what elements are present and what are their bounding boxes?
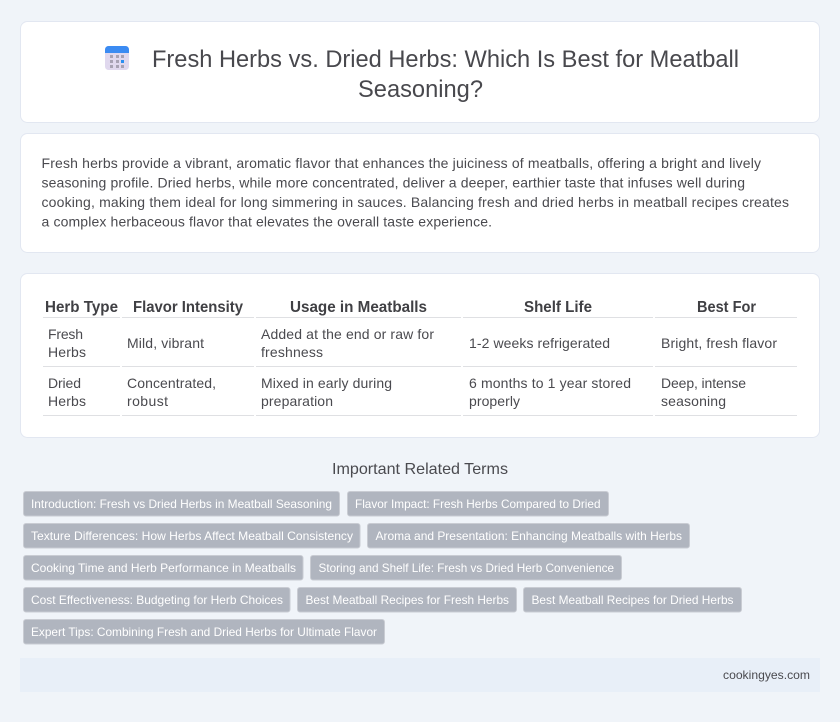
table row: dried herbs: properly (469, 393, 520, 409)
table row: fresh herbs: Mild, vibrant (127, 335, 204, 351)
table row: dried herbs: preparation (261, 393, 333, 409)
heading: related terms: Important Related Terms (332, 461, 508, 478)
related term chips (24, 492, 742, 644)
chip: cooking time (24, 556, 303, 580)
chip: texture: Texture Differences: How Herbs Affect Meatball Consistency (31, 529, 353, 543)
chip: aroma: Aroma and Presentation: Enhancing Meatballs with Herbs (376, 529, 682, 543)
table row: dried herbs: Herbs (48, 393, 86, 409)
chip: fresh recipes: Best Meatball Recipes for Fresh Herbs (306, 593, 509, 607)
table row: fresh herbs: Herbs (48, 344, 86, 360)
chip: dried recipes: Best Meatball Recipes for Dried Herbs (532, 593, 734, 607)
panel: introduction (20, 134, 820, 252)
table row: fresh herbs: freshness (261, 344, 323, 360)
panel: comparison table (20, 274, 820, 438)
table row: dried herbs: Concentrated, (127, 375, 216, 391)
table header: Flavor Intensity (133, 299, 243, 316)
text block: introduction: Fresh herbs provide a vibrant, aromatic flavor that enhances the juiciness of meatballs, offering a bright and lively (42, 155, 761, 171)
table row: fresh herbs: Fresh (48, 326, 83, 342)
chip: dried recipes (524, 588, 742, 612)
chip: storing (310, 556, 622, 580)
footer (20, 658, 820, 692)
table row: dried herbs: Deep, intense (661, 375, 746, 391)
chip: flavor impact: Flavor Impact: Fresh Herbs Compared to Dried (355, 497, 600, 511)
chip: storing: Storing and Shelf Life: Fresh vs Dried Herb Convenience (318, 561, 614, 575)
text block: introduction (42, 155, 789, 230)
table row: dried herbs: seasoning (661, 393, 726, 409)
table row: fresh herbs: 1-2 weeks refrigerated (469, 335, 610, 351)
chip: texture (24, 524, 360, 548)
table row: fresh herbs (48, 326, 777, 360)
chip: flavor impact (348, 492, 608, 516)
icon: calendar (105, 46, 129, 70)
table header: Herb Type (45, 299, 118, 316)
panel: header (20, 22, 820, 122)
chip: cost (24, 588, 290, 612)
table row: dried herbs: Mixed in early during (261, 375, 392, 391)
text block: introduction: seasoning profile. Dried herbs, while more concentrated, deliver a deeper, earthier taste that infuses well during (42, 174, 745, 190)
table header (45, 299, 756, 316)
text block: introduction: a complex herbaceous flavor that elevates the overall taste experience. (42, 214, 492, 230)
chip: introduction (24, 492, 340, 516)
table row: fresh herbs: Bright, fresh flavor (661, 335, 777, 351)
chip: expert tips (24, 620, 384, 644)
table row: dried herbs (48, 375, 746, 409)
table row: dried herbs: 6 months to 1 year stored (469, 375, 631, 391)
table header: Best For (697, 299, 756, 316)
chip: aroma (368, 524, 690, 548)
text block: introduction: cooking, making them ideal for long simmering in sauces. Balancing fresh and dried herbs in meatball recipes creates (42, 194, 789, 210)
title (152, 46, 739, 103)
table header: Shelf Life (524, 299, 592, 316)
table header: Usage in Meatballs (290, 299, 427, 316)
chip: cost: Cost Effectiveness: Budgeting for Herb Choices (31, 593, 283, 607)
chip: expert tips: Expert Tips: Combining Fresh and Dried Herbs for Ultimate Flavor (31, 625, 377, 639)
title: Seasoning? (358, 76, 483, 103)
footer: cookingyes.com (723, 668, 810, 682)
chip: cooking time: Cooking Time and Herb Performance in Meatballs (31, 561, 296, 575)
chip: fresh recipes (298, 588, 516, 612)
table row: dried herbs: Dried (48, 375, 81, 391)
title: Fresh Herbs vs. Dried Herbs: Which Is Best for Meatball (152, 46, 739, 73)
table row: fresh herbs: Added at the end or raw for (261, 326, 434, 342)
table row: dried herbs: robust (127, 393, 168, 409)
chip: introduction: Introduction: Fresh vs Dried Herbs in Meatball Seasoning (31, 497, 332, 511)
